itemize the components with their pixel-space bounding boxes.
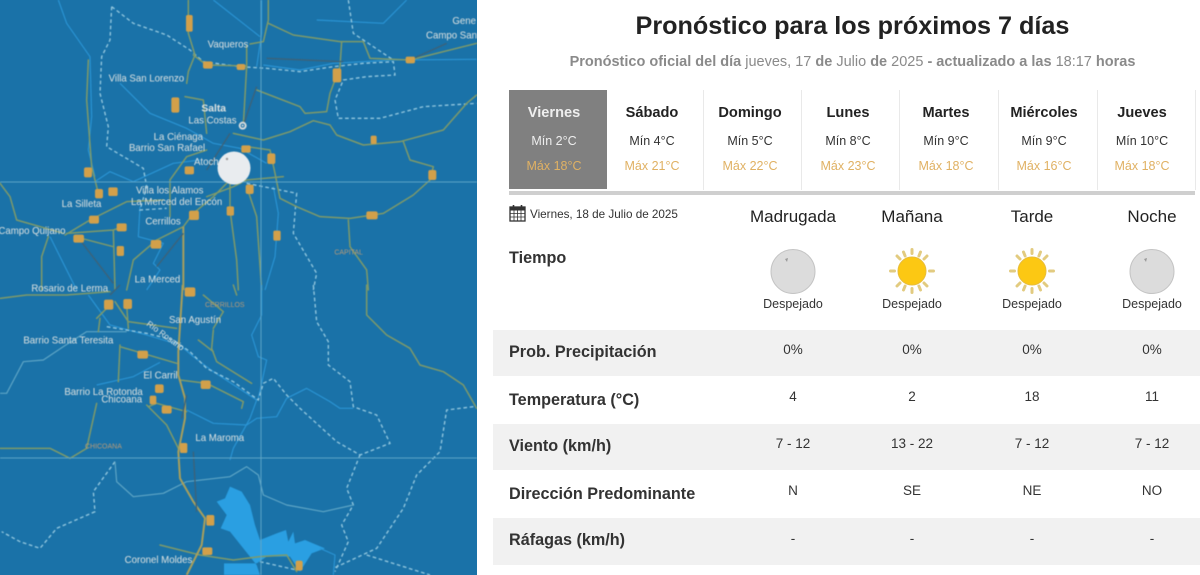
tab: Miércoles (1010, 105, 1078, 173)
tab: Viernes (509, 90, 607, 189)
row: precipitation: 0% (1142, 342, 1162, 357)
row: wind: 7 - 12 (1135, 436, 1169, 451)
row: temperature: 18 (1024, 389, 1040, 404)
row: wind: 13 - 22 (891, 436, 933, 451)
place labels: La Merced del Encón (131, 197, 222, 208)
tab: Viernes: Mín 2°C (531, 134, 577, 148)
row: precipitation (509, 342, 1162, 361)
row: direction: NO (1142, 483, 1162, 498)
place labels: Chicoana (101, 395, 143, 406)
place labels: CERRILLOS (205, 302, 245, 309)
place labels: La Ciénaga (154, 132, 204, 143)
place labels (23, 284, 245, 566)
row: temperature (509, 389, 1159, 409)
row: wind (509, 436, 1169, 455)
place labels: Villa los Alamos (136, 186, 204, 197)
row: gusts (509, 531, 1154, 549)
tab: Lunes: Lunes (826, 105, 869, 121)
place labels: Villa San Lorenzo (109, 73, 184, 84)
row band (493, 330, 1200, 376)
place labels: Atocha (194, 157, 225, 168)
grid lines (0, 0, 477, 575)
tab: Miércoles: Mín 9°C (1021, 134, 1067, 148)
place labels: Rosario de Lerma (31, 284, 109, 295)
tab: Sábado (624, 105, 680, 173)
row: gusts: - (791, 531, 795, 546)
row: precipitation: 0% (902, 342, 922, 357)
map upper half: roads, rivers and boundaries (0, 0, 480, 290)
tab: Jueves: Mín 10°C (1116, 134, 1168, 148)
icon: sun (889, 248, 935, 294)
place labels: Las Costas (188, 116, 237, 127)
description: Despejado (1002, 297, 1062, 311)
period heading: Madrugada: Madrugada (750, 207, 836, 226)
place labels: CAPITAL (334, 249, 363, 256)
route shields (73, 15, 436, 256)
tab: Miércoles: Miércoles (1010, 105, 1078, 121)
place labels: La Merced (135, 275, 180, 286)
tab: Lunes: Máx 23°C (820, 159, 876, 173)
row: temperature: 11 (1145, 389, 1159, 404)
place labels: La Maroma (195, 433, 245, 444)
icon: calendar (509, 205, 526, 222)
row: direction: N (788, 483, 798, 498)
place labels: Río Rosario (145, 319, 187, 353)
subtitle: Pronóstico oficial del día jueves, 17 de Julio de 2025 - actualizado a las 18:17 horas (570, 54, 1135, 70)
tab: Miércoles: Máx 16°C (1016, 159, 1072, 173)
row: wind: 7 - 12 (776, 436, 810, 451)
description: Despejado (882, 297, 942, 311)
tab: Jueves: Jueves (1117, 105, 1167, 121)
place labels: Campo Quijano (0, 226, 65, 237)
tab: Martes (918, 105, 974, 173)
route shields (104, 287, 303, 571)
tab: Domingo (718, 105, 782, 173)
tab: Domingo: Máx 22°C (722, 159, 778, 173)
date: Viernes, 18 de Julio de 2025 (530, 208, 678, 221)
row: direction: NE (1023, 483, 1041, 498)
place labels: El Carril (143, 371, 178, 382)
period heading: Noche: Noche (1127, 207, 1177, 226)
tab: Sábado: Sábado (626, 105, 678, 121)
icon: clear night (1130, 249, 1174, 294)
icon: clear night (770, 249, 816, 294)
description: Despejado (1122, 297, 1182, 311)
tab: Sábado: Máx 21°C (624, 159, 680, 173)
tab: Jueves (1114, 105, 1170, 173)
tab: Lunes (820, 105, 876, 173)
period heading: Tarde: Tarde (1011, 207, 1053, 226)
tab: Jueves: Máx 18°C (1114, 159, 1170, 173)
tab: Lunes: Mín 8°C (825, 134, 871, 148)
place labels: Barrio San Rafael (129, 143, 205, 154)
row band (493, 518, 1200, 565)
row label: Tiempo: Tiempo (509, 249, 566, 267)
place labels: Barrio La Rotonda (64, 387, 143, 398)
row: direction (509, 483, 1162, 503)
tab: Viernes: Máx 18°C (526, 159, 582, 173)
place labels: Gene (452, 16, 476, 27)
place labels: Coronel Moldes (125, 555, 192, 566)
row: gusts: Ráfagas (km/h) (509, 531, 625, 549)
row: gusts: - (1150, 531, 1154, 546)
tab: Domingo: Domingo (718, 105, 782, 121)
row: wind: Viento (km/h) (509, 437, 611, 455)
place labels: Salta (201, 103, 226, 114)
row: precipitation: Prob. Precipitación (509, 343, 657, 361)
icon: sun (1009, 248, 1055, 294)
title: Pronóstico para los próximos 7 días (636, 12, 1069, 40)
place labels: Cerrillos (145, 216, 181, 227)
place labels: La Silleta (62, 199, 102, 210)
tab: Viernes: Viernes (528, 105, 580, 121)
row: temperature: 2 (908, 389, 916, 404)
tab: Martes: Martes (922, 105, 970, 121)
row: precipitation: 0% (783, 342, 803, 357)
row: wind: 7 - 12 (1015, 436, 1049, 451)
row: gusts: - (1030, 531, 1034, 546)
place labels: CHICOANA (85, 444, 122, 451)
place labels: San Agustín (169, 315, 221, 326)
row band (493, 424, 1200, 470)
tab: Martes: Máx 18°C (918, 159, 974, 173)
panel: seven day tabs (509, 90, 1196, 195)
map lower half: roads, reservoir and labels (0, 284, 477, 575)
row: temperature: 4 (789, 389, 797, 404)
tab: Domingo: Mín 5°C (727, 134, 773, 148)
reservoir (217, 487, 325, 575)
row: direction: SE (903, 483, 921, 498)
tab: Sábado: Mín 4°C (629, 134, 675, 148)
place labels: Vaqueros (208, 40, 248, 51)
tab: Martes: Mín 9°C (923, 134, 969, 148)
period heading: Mañana: Mañana (881, 207, 943, 226)
place labels (0, 16, 480, 286)
icon: location marker (218, 152, 250, 184)
row: temperature: Temperatura (°C) (509, 391, 639, 409)
place labels: Barrio Santa Teresita (23, 336, 114, 347)
map panel (0, 0, 477, 575)
row: gusts: - (910, 531, 914, 546)
row: precipitation: 0% (1022, 342, 1042, 357)
row: direction: Dirección Predominante (509, 485, 695, 503)
description: Despejado (763, 297, 823, 311)
